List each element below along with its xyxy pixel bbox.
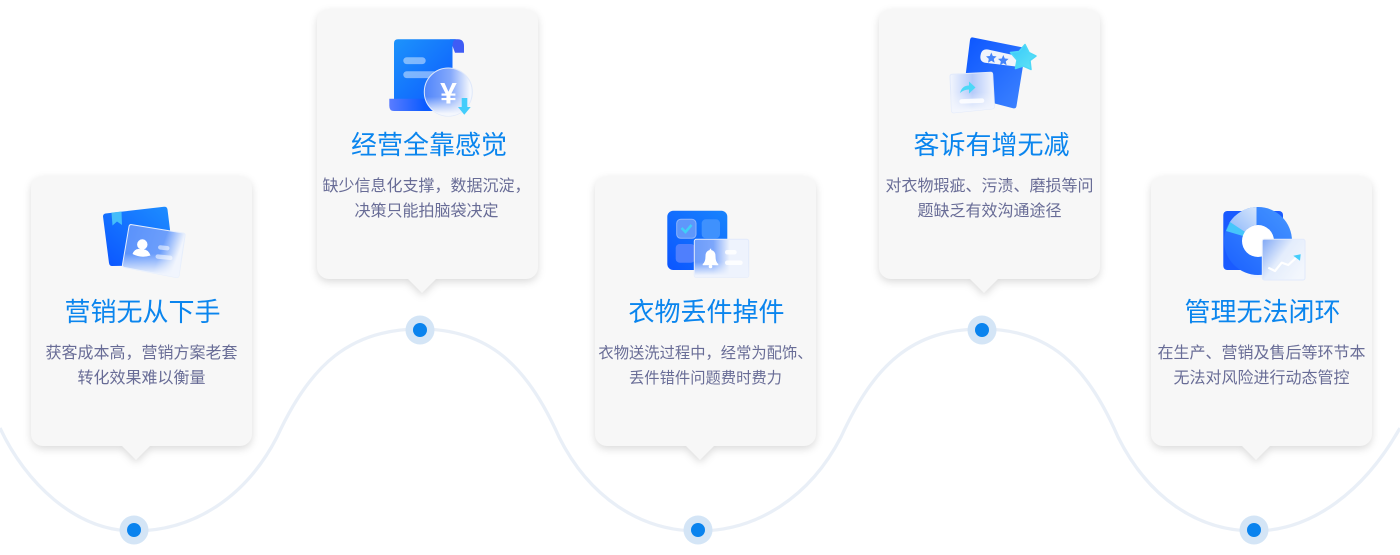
heading: 客诉有增无减 [913, 130, 1070, 160]
icon: donut chart [1223, 207, 1306, 280]
panel: 管理无法闭环 [1148, 182, 1375, 463]
timeline dot 1 [120, 516, 148, 544]
pointer [121, 445, 151, 460]
panel: 经营全靠感觉 [314, 14, 541, 296]
description: 转化效果难以衡量 [77, 370, 206, 387]
description: 缺少信息化支撑，数据沉淀， [322, 178, 530, 195]
heading: 衣物丢件掉件 [628, 297, 784, 327]
heading: 管理无法闭环 [1184, 297, 1340, 327]
description [1157, 344, 1366, 387]
description: 获客成本高，营销方案老套 [45, 345, 238, 362]
pointer [407, 278, 437, 293]
pointer [969, 278, 999, 293]
panel: 营销无从下手 [28, 182, 255, 463]
heading: 营销无从下手 [64, 297, 220, 327]
icon: bill with yuan [389, 39, 473, 116]
icon: grid and bell [667, 210, 750, 278]
timeline dot 4 [968, 316, 996, 344]
timeline dot 5 [1240, 516, 1268, 544]
description [322, 177, 530, 220]
description: 在生产、营销及售后等环节本 [1157, 345, 1366, 362]
description: 决策只能拍脑袋决定 [354, 203, 498, 220]
yuan sign: ¥ [440, 78, 457, 110]
description: 对衣物瑕疵、污渍、磨损等问 [885, 178, 1094, 195]
heading: 经营全靠感觉 [351, 130, 507, 160]
panel: 衣物丢件掉件 [592, 182, 819, 463]
icon: contact card [103, 206, 186, 278]
icon: star rating [950, 37, 1037, 114]
description: 衣物送洗过程中，经常为配饰、 [598, 345, 813, 362]
description [598, 344, 813, 387]
description [885, 177, 1094, 220]
timeline dot 3 [684, 516, 712, 544]
pointer [685, 445, 715, 460]
pointer [1241, 445, 1271, 460]
description: 丢件错件问题费时费力 [629, 370, 782, 387]
description [45, 344, 238, 387]
timeline dot 2 [406, 316, 434, 344]
description: 无法对风险进行动态管控 [1173, 370, 1350, 387]
description: 题缺乏有效沟通途径 [917, 203, 1062, 220]
panel: 客诉有增无减 [876, 14, 1103, 296]
